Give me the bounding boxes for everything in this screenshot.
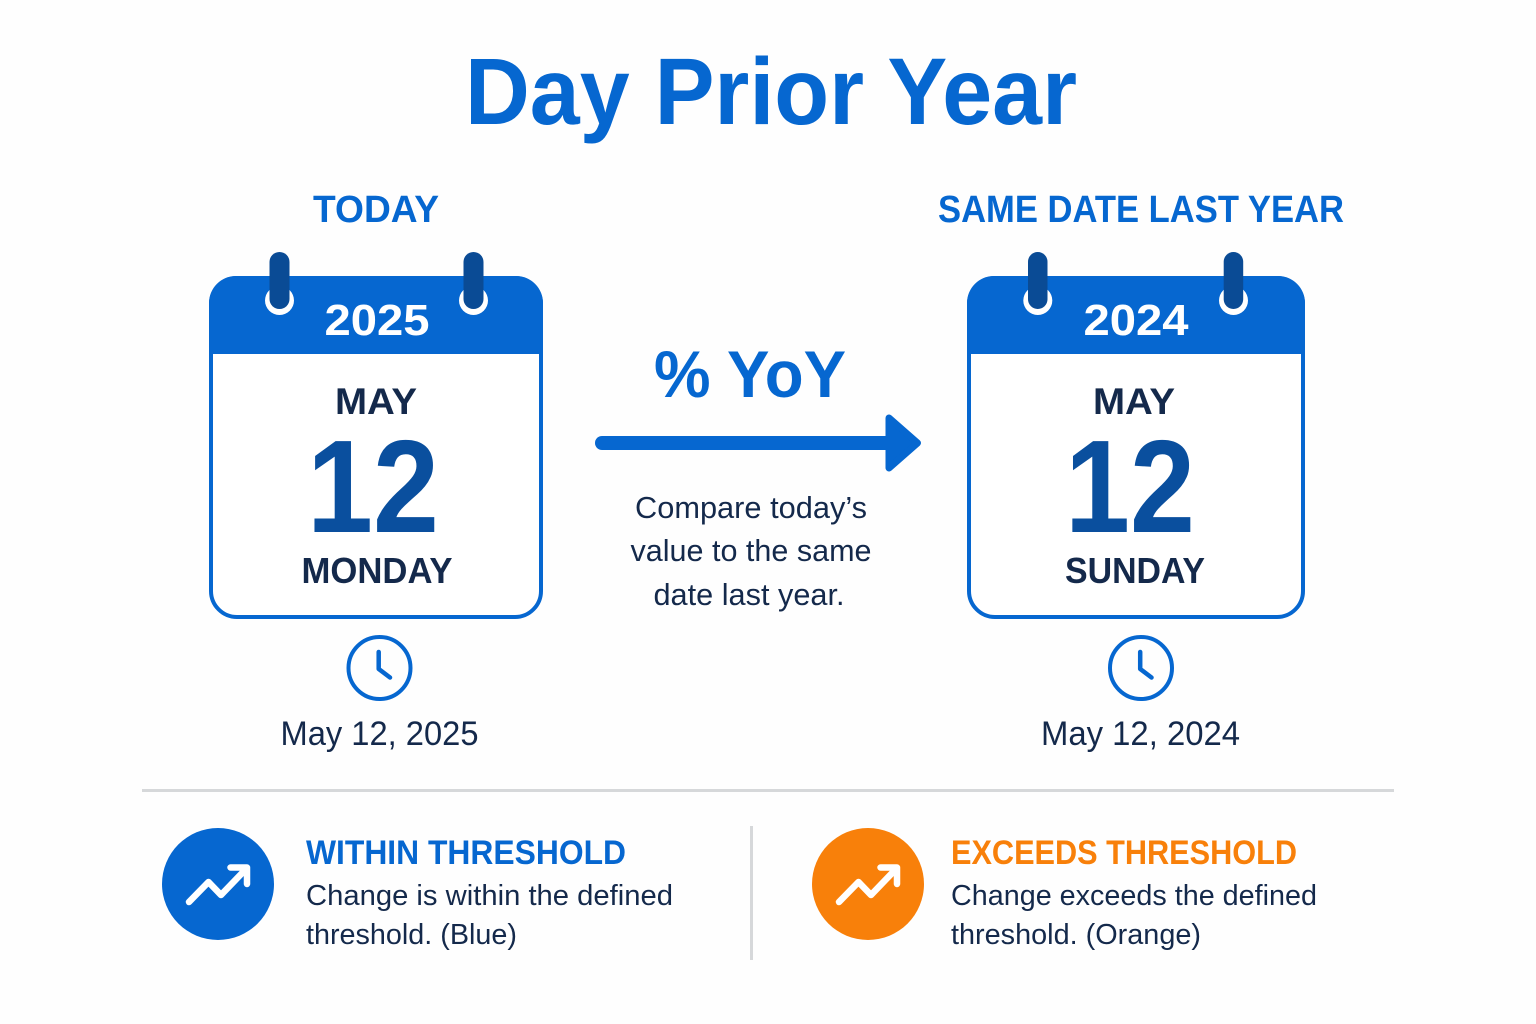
panel: calendar 2024: SUNDAY (1065, 550, 1205, 591)
panel: calendar 2025 (209, 252, 543, 617)
icon: orange trend arrow (812, 828, 924, 940)
text: comparison description: value to the same (630, 533, 872, 568)
panel: calendar 2024: MAY (1093, 381, 1175, 422)
icon: blue trend arrow (162, 828, 274, 940)
panel: calendar 2025: MAY (335, 381, 417, 422)
icon: clock right (1110, 637, 1172, 699)
heading: exceeds threshold: EXCEEDS THRESHOLD (951, 834, 1297, 872)
panel: calendar 2025: 2025 (324, 296, 430, 345)
text: exceeds description: threshold. (Orange) (951, 919, 1201, 951)
panel: calendar 2024: 2024 (1084, 296, 1189, 345)
text: exceeds description (951, 880, 1317, 951)
text: comparison description: date last year. (654, 577, 844, 612)
text: comparison description: Compare today’s (635, 490, 867, 525)
date: May 12, 2025: May 12, 2025 (280, 715, 478, 753)
title: Day Prior Year (465, 39, 1077, 145)
panel: calendar 2024 (967, 252, 1305, 617)
text: exceeds description: Change exceeds the defined (951, 880, 1317, 912)
date: May 12, 2024: May 12, 2024 (1041, 715, 1240, 753)
text: within description: Change is within the defined (306, 880, 673, 912)
heading: same date last year: SAME DATE LAST YEAR (938, 189, 1344, 231)
arrow (595, 418, 918, 468)
panel: calendar 2025: 12 (307, 413, 439, 560)
icon: clock left (348, 637, 410, 699)
text: comparison description (630, 490, 872, 612)
panel: within threshold (162, 828, 673, 951)
heading: within threshold: WITHIN THRESHOLD (306, 834, 626, 872)
text: within description: threshold. (Blue) (306, 919, 517, 951)
text: within description (306, 880, 673, 951)
heading: today: TODAY (313, 189, 439, 231)
panel: calendar 2024: 12 (1065, 413, 1195, 560)
panel: calendar 2025: MONDAY (302, 550, 452, 591)
label: % YoY: % YoY (654, 337, 846, 411)
panel: exceeds threshold (812, 828, 1317, 951)
